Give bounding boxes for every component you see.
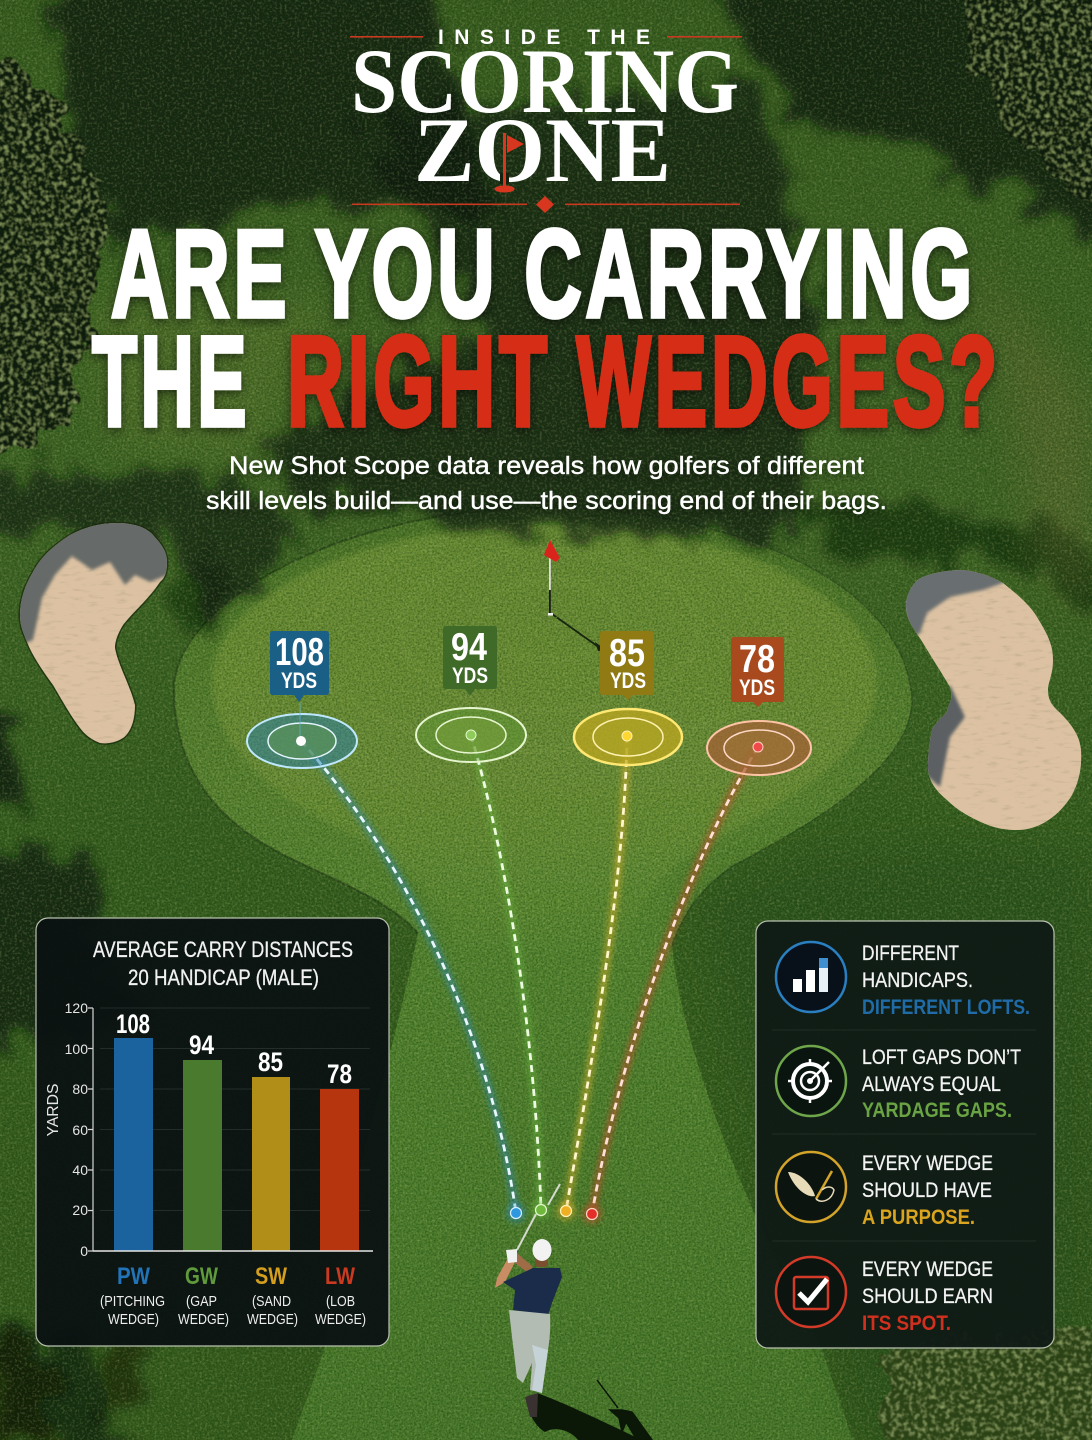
takeaway: loft gaps (776, 1045, 1021, 1122)
bar chart (45, 1000, 373, 1259)
callout: 85 yds: YDS (610, 668, 646, 693)
callout: 94 yds (443, 626, 497, 696)
takeaway: different lofts: HANDICAPS. (862, 968, 973, 992)
fairway, collar and green (174, 508, 912, 1440)
label: LW (315, 1263, 366, 1328)
callout: 108 yds (270, 631, 329, 702)
y axis: 40 (72, 1162, 88, 1178)
trajectory: LW red (592, 747, 758, 1214)
callout: 85 yds: 85 (609, 632, 645, 675)
y axis: 0 (80, 1243, 88, 1259)
icon: flag in the O (494, 133, 524, 192)
label: GW: WEDGE) (178, 1311, 229, 1328)
subtitle (206, 452, 887, 515)
takeaway: purpose (776, 1151, 993, 1229)
y axis: 120 (65, 1000, 88, 1016)
shot trajectories (301, 735, 758, 1214)
label: LW: LW (325, 1263, 355, 1290)
trajectory: GW green (471, 735, 541, 1210)
label: GW: GW (185, 1263, 218, 1290)
takeaway: different lofts: DIFFERENT (862, 941, 959, 965)
lit grass patch right (960, 250, 1092, 620)
wordmark: zone: ZONE (414, 99, 671, 201)
icon: target with arrow (776, 1046, 846, 1116)
takeaway: different lofts: DIFFERENT LOFTS. (862, 995, 1030, 1019)
title: Inside the Scoring Zone logo (350, 26, 742, 213)
takeaway: loft gaps: ALWAYS EQUAL (862, 1072, 1001, 1096)
takeaway: earn its spot (776, 1257, 993, 1335)
takeaway: loft gaps: YARDAGE GAPS. (862, 1098, 1012, 1122)
chart title (93, 937, 353, 990)
y axis: YARDS (45, 1084, 62, 1136)
tee markers (506, 1200, 602, 1224)
y axis: 20 (72, 1202, 88, 1218)
target: PW 108 yards (247, 631, 357, 768)
y axis: 100 (65, 1041, 88, 1057)
headline: THE (92, 310, 250, 454)
panel: key takeaways (756, 921, 1054, 1348)
bar: GW (183, 1030, 222, 1251)
takeaway: different lofts (776, 941, 1030, 1019)
icon: checkbox (776, 1257, 846, 1327)
label: PW: (PITCHING (100, 1293, 165, 1310)
chart title: AVERAGE CARRY DISTANCES (93, 937, 353, 962)
takeaway: earn its spot: ITS SPOT. (862, 1311, 951, 1335)
y axis: 80 (72, 1081, 88, 1097)
x axis labels (100, 1263, 366, 1328)
label: PW: PW (117, 1263, 150, 1290)
label: SW: WEDGE) (247, 1311, 298, 1328)
callout: 78 yds: YDS (739, 675, 775, 700)
bar: PW: 108 (116, 1009, 150, 1039)
takeaway: purpose: SHOULD HAVE (862, 1178, 992, 1202)
subtitle: New Shot Scope data reveals how golfers of different (229, 452, 864, 480)
icon: bar signal (776, 942, 846, 1012)
golfer shadow (530, 1393, 642, 1440)
wordmark: scoring: SCORING (351, 30, 739, 132)
label: PW (100, 1263, 165, 1328)
label: SW (247, 1263, 298, 1328)
bar: LW: 78 (327, 1059, 352, 1089)
trajectory: PW blue (301, 741, 516, 1213)
callout: 78 yds: 78 (739, 638, 775, 681)
label: LW: (LOB (326, 1293, 355, 1310)
callout: 108 yds: YDS (281, 668, 317, 693)
golfer (495, 1184, 652, 1440)
bunker: left (18, 522, 168, 745)
target: GW 94 yards (416, 626, 526, 762)
target: LW 78 yards (707, 637, 811, 775)
takeaway: loft gaps: LOFT GAPS DON’T (862, 1045, 1021, 1069)
callout: 78 yds (731, 637, 784, 707)
label: SW: (SAND (252, 1293, 291, 1310)
y axis (45, 1000, 93, 1259)
bunker: right (906, 570, 1082, 830)
takeaway: purpose: EVERY WEDGE (862, 1151, 993, 1175)
target: SW 85 yards (574, 631, 682, 765)
callout: 108 yds: 108 (275, 631, 324, 674)
icon: wedge clubs (776, 1152, 846, 1222)
bar: PW (114, 1009, 153, 1251)
callout: 85 yds (600, 631, 654, 700)
label: SW: SW (255, 1263, 287, 1290)
label: PW: WEDGE) (108, 1311, 159, 1328)
bar: SW (252, 1047, 290, 1251)
callout: 94 yds: 94 (451, 626, 487, 669)
eyebrow: inside the: INSIDE THE (438, 26, 650, 49)
chart title: 20 HANDICAP (MALE) (128, 965, 319, 990)
headline (92, 206, 1001, 454)
divider with diamond (352, 196, 740, 213)
bar: GW: 94 (189, 1030, 214, 1060)
takeaway: earn its spot: SHOULD EARN (862, 1284, 993, 1308)
label: GW: (GAP (186, 1293, 217, 1310)
panel: average carry distances chart (36, 918, 389, 1346)
flagstick and hole (539, 540, 606, 651)
trajectory: SW yellow (566, 736, 627, 1211)
label: LW: WEDGE) (315, 1311, 366, 1328)
label: GW (178, 1263, 229, 1328)
rough darker zones (700, 844, 1092, 1440)
y axis: 60 (72, 1122, 88, 1138)
callout: 94 yds: YDS (452, 663, 488, 688)
takeaway: earn its spot: EVERY WEDGE (862, 1257, 993, 1281)
takeaway: purpose: A PURPOSE. (862, 1205, 975, 1229)
subtitle: skill levels build—and use—the scoring end of their bags. (206, 487, 887, 515)
bar: LW (320, 1059, 359, 1251)
bar: SW: 85 (258, 1047, 283, 1077)
